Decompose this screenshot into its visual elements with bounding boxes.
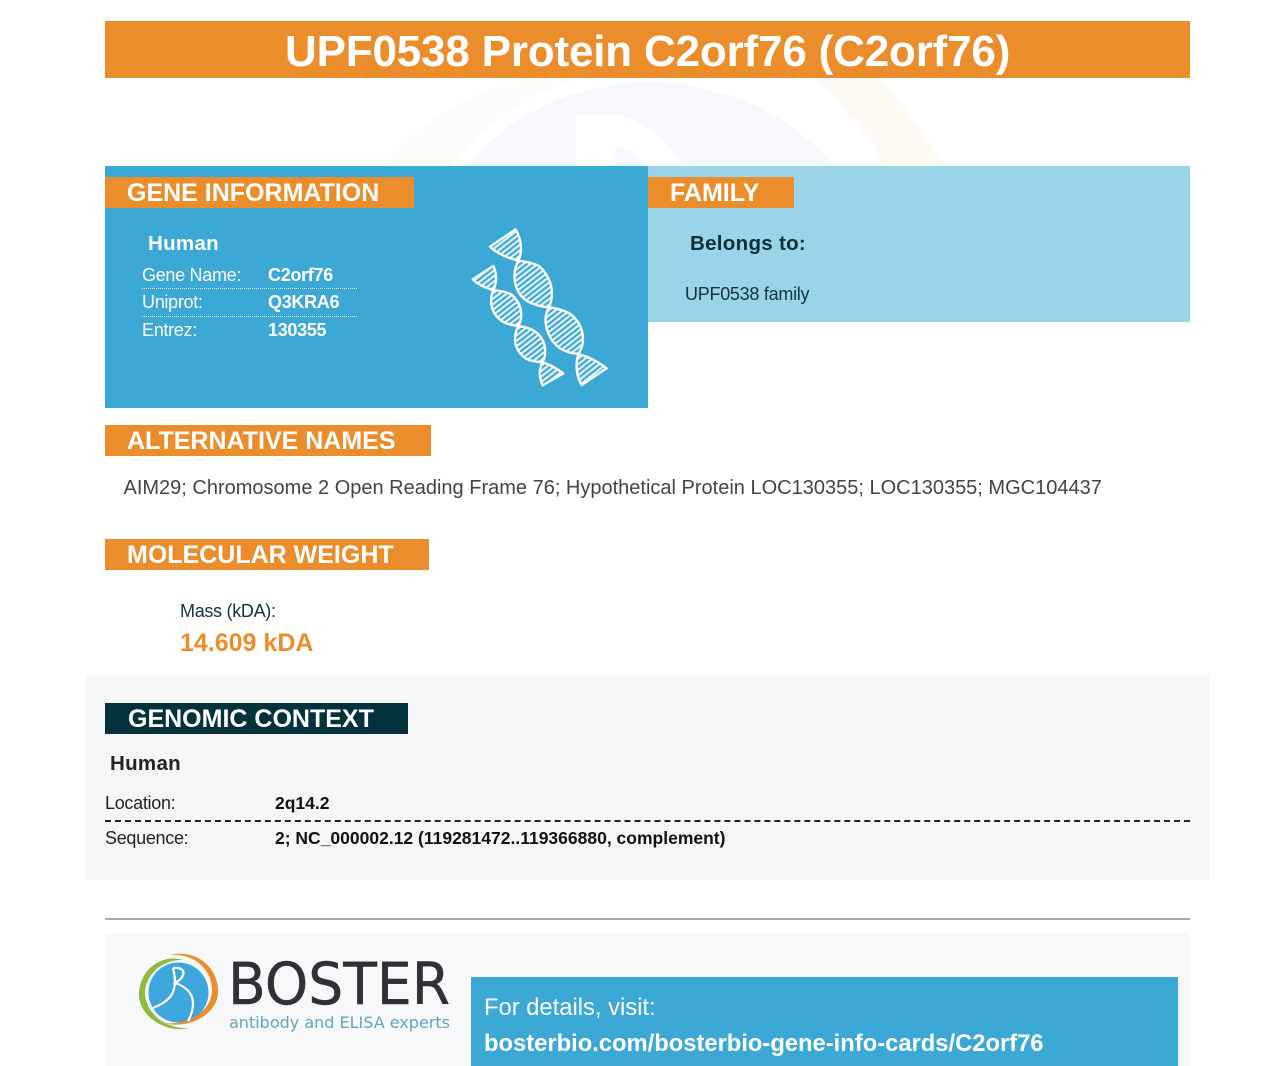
- heading: family: FAMILY: [670, 179, 759, 207]
- entrez row: 130355: [268, 320, 326, 340]
- mass value: 14.609 kDA: [180, 629, 313, 657]
- panel: family: [648, 166, 1190, 322]
- visit label: For details, visit:: [484, 994, 656, 1021]
- divider line: [105, 918, 1190, 920]
- entrez row: [142, 320, 326, 340]
- panel: footer: [105, 933, 1190, 1066]
- heading: family: [648, 177, 794, 208]
- belongs to label: Belongs to:: [690, 232, 806, 255]
- sequence row: Sequence:: [105, 828, 188, 848]
- uniprot row: Q3KRA6: [268, 292, 339, 312]
- sequence row: [105, 828, 725, 848]
- panel: gene information: [105, 166, 648, 408]
- panel: genomic context: 2; NC_000002.12 (119281472..119366880, complement): [275, 828, 725, 848]
- url: bosterbio.com/bosterbio-gene-info-cards/C2orf76: [484, 1030, 1044, 1057]
- gene name row: [142, 264, 357, 289]
- alternative names text: AIM29; Chromosome 2 Open Reading Frame 76; Hypothetical Protein LOC130355; LOC130355; MGC104437: [124, 477, 1102, 499]
- location row: Location:: [105, 793, 175, 813]
- gene name row: Gene Name:: [142, 265, 241, 285]
- family value: UPF0538 family: [685, 284, 809, 304]
- heading: gene information: GENE INFORMATION: [127, 179, 379, 207]
- logo mark: [139, 954, 218, 1029]
- background watermark logo: [466, 78, 943, 166]
- tagline: antibody and ELISA experts: [229, 1013, 450, 1032]
- heading: genomic context: GENOMIC CONTEXT: [128, 705, 374, 733]
- entrez row: Entrez:: [142, 320, 197, 340]
- heading: molecular weight: MOLECULAR WEIGHT: [127, 541, 394, 569]
- uniprot row: [142, 291, 357, 317]
- location row: [105, 792, 1190, 822]
- heading: alternative names: ALTERNATIVE NAMES: [127, 427, 396, 455]
- call to action box: [471, 977, 1178, 1066]
- uniprot row: Uniprot:: [142, 292, 203, 312]
- wordmark: BOSTER: [228, 950, 450, 1018]
- icon: DNA helices: [472, 228, 608, 386]
- species label: Human: [148, 232, 219, 255]
- title banner: [105, 21, 1190, 78]
- mass label: Mass (kDA):: [180, 601, 276, 621]
- panel: genomic context: [86, 674, 1209, 880]
- species label: Human: [110, 752, 181, 775]
- gene name row: C2orf76: [268, 265, 333, 285]
- location row: 2q14.2: [275, 793, 329, 813]
- title banner: UPF0538 Protein C2orf76 (C2orf76): [285, 27, 1010, 76]
- logo: Boster: [138, 950, 450, 1032]
